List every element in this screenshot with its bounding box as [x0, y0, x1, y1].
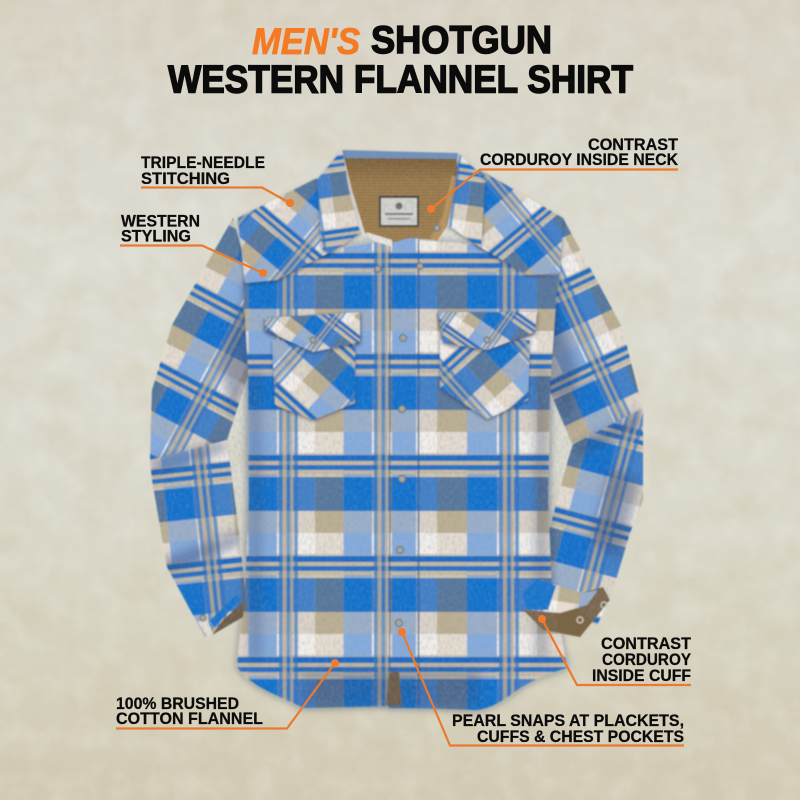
left collar	[317, 150, 360, 253]
leader dot	[427, 205, 435, 213]
corduroy placket edge	[430, 175, 458, 241]
brushed fabric grain	[140, 140, 650, 720]
label: CONTRAST	[588, 136, 678, 154]
label line 2: CORDUROY	[602, 651, 691, 669]
label line 3: INSIDE CUFF	[592, 667, 691, 685]
callout: contrast corduroy inside neck	[427, 136, 678, 213]
label line 2: STYLING	[121, 228, 191, 246]
shirt illustration	[140, 140, 650, 720]
left sleeve	[150, 218, 250, 637]
top of collar strip	[342, 150, 458, 159]
right front panel	[416, 240, 567, 710]
left chest pocket	[265, 312, 360, 420]
snaps	[310, 225, 490, 626]
right chest pocket	[438, 312, 537, 419]
leader dot	[286, 199, 294, 207]
title line: WESTERN FLANNEL SHIRT: WESTERN FLANNEL SHIRT	[168, 58, 633, 102]
leader line	[116, 663, 335, 728]
leader dot	[398, 628, 406, 636]
placket seam shadows	[389, 240, 420, 708]
leader dot	[259, 269, 267, 277]
leader dot	[331, 659, 339, 667]
label: CONTRAST	[601, 635, 691, 653]
right yoke	[452, 170, 563, 275]
callout: brushed cotton flannel	[116, 659, 339, 728]
label: 100% BRUSHED	[116, 695, 239, 713]
label: TRIPLE-NEEDLE	[141, 154, 265, 172]
label line 2: STITCHING	[141, 170, 230, 188]
left collar tip	[366, 232, 392, 247]
title word: SHOTGUN: SHOTGUN	[371, 19, 552, 62]
callout: contrast corduroy inside cuff	[538, 615, 691, 685]
label: WESTERN	[121, 212, 200, 230]
right collar	[448, 153, 485, 248]
title word: MEN'S: MEN'S	[252, 21, 360, 62]
callout: triple-needle stitching	[141, 154, 294, 207]
left yoke	[238, 178, 330, 283]
label line 2: CUFFS & CHEST POCKETS	[477, 728, 684, 746]
body side shading	[248, 370, 548, 706]
sleeve wrinkle shading	[150, 300, 643, 575]
corduroy inside neck	[344, 156, 458, 243]
right pocket flap	[438, 312, 537, 350]
front placket	[390, 238, 418, 708]
left front panel	[237, 240, 392, 708]
callout: pearl snaps	[398, 628, 684, 746]
right sleeve	[522, 218, 643, 625]
neck label	[380, 197, 418, 226]
right cuff	[522, 578, 610, 637]
label: PEARL SNAPS AT PLACKETS,	[452, 712, 684, 730]
title	[168, 19, 633, 102]
left pocket flap	[265, 312, 360, 352]
hem inner corduroy at placket	[386, 671, 402, 707]
label line 2: COTTON FLANNEL	[116, 710, 263, 728]
shirt body	[237, 238, 567, 710]
leader line	[141, 188, 290, 203]
leader dot	[538, 615, 546, 623]
callout: western styling	[120, 212, 267, 277]
label line 2: CORDUROY INSIDE NECK	[480, 151, 678, 169]
left cuff	[198, 595, 245, 637]
leader line	[120, 246, 263, 273]
leader line	[431, 170, 678, 209]
leader line	[542, 619, 691, 685]
leader line	[402, 632, 684, 746]
